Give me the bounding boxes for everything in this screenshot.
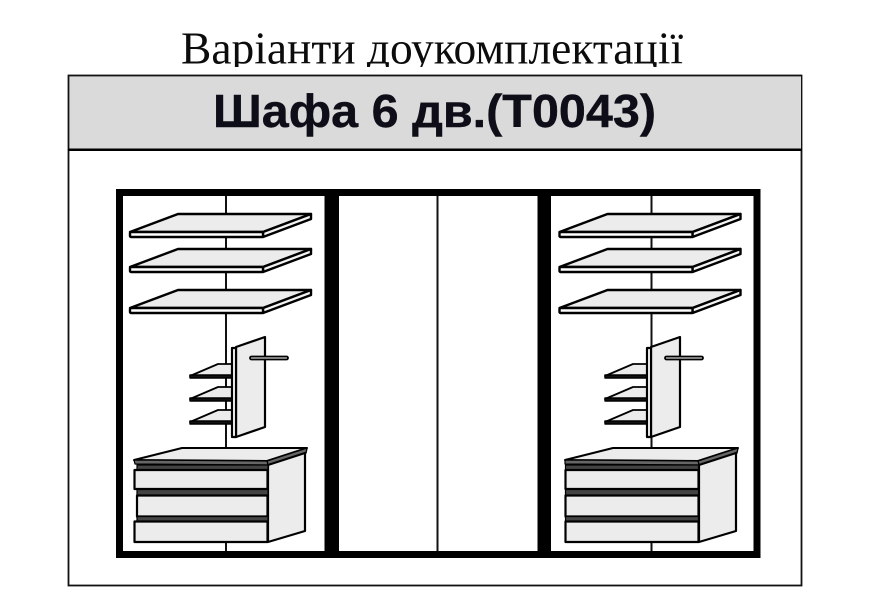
header band (70, 76, 801, 148)
heading: Шафа 6 дв.(T0043) (213, 85, 656, 137)
organizer with rail and small shelves (605, 337, 703, 437)
centre line: middle section (436, 193, 438, 555)
drawer unit (134, 448, 307, 542)
shelf 2 (560, 249, 740, 272)
centre line: left section (225, 193, 227, 555)
card frame (68, 76, 802, 586)
shelf 3 (130, 290, 311, 313)
drawer unit (565, 448, 738, 542)
organizer with rail and small shelves (190, 337, 288, 437)
title: Варіанти доукомплектації (181, 24, 683, 74)
shelf 1 (560, 214, 740, 237)
header divider (68, 148, 802, 151)
left divider (324, 190, 339, 558)
wardrobe diagram (120, 190, 757, 558)
infographic (68, 33, 802, 586)
wardrobe outer frame (120, 192, 757, 554)
left section fittings (130, 214, 311, 542)
shelf 2 (130, 249, 311, 272)
shelf 3 (560, 290, 740, 313)
panel: wardrobe card (68, 76, 802, 586)
centre line: right section (650, 193, 652, 555)
right section fittings (560, 214, 740, 542)
right divider (538, 190, 551, 558)
shelf 1 (130, 214, 311, 237)
